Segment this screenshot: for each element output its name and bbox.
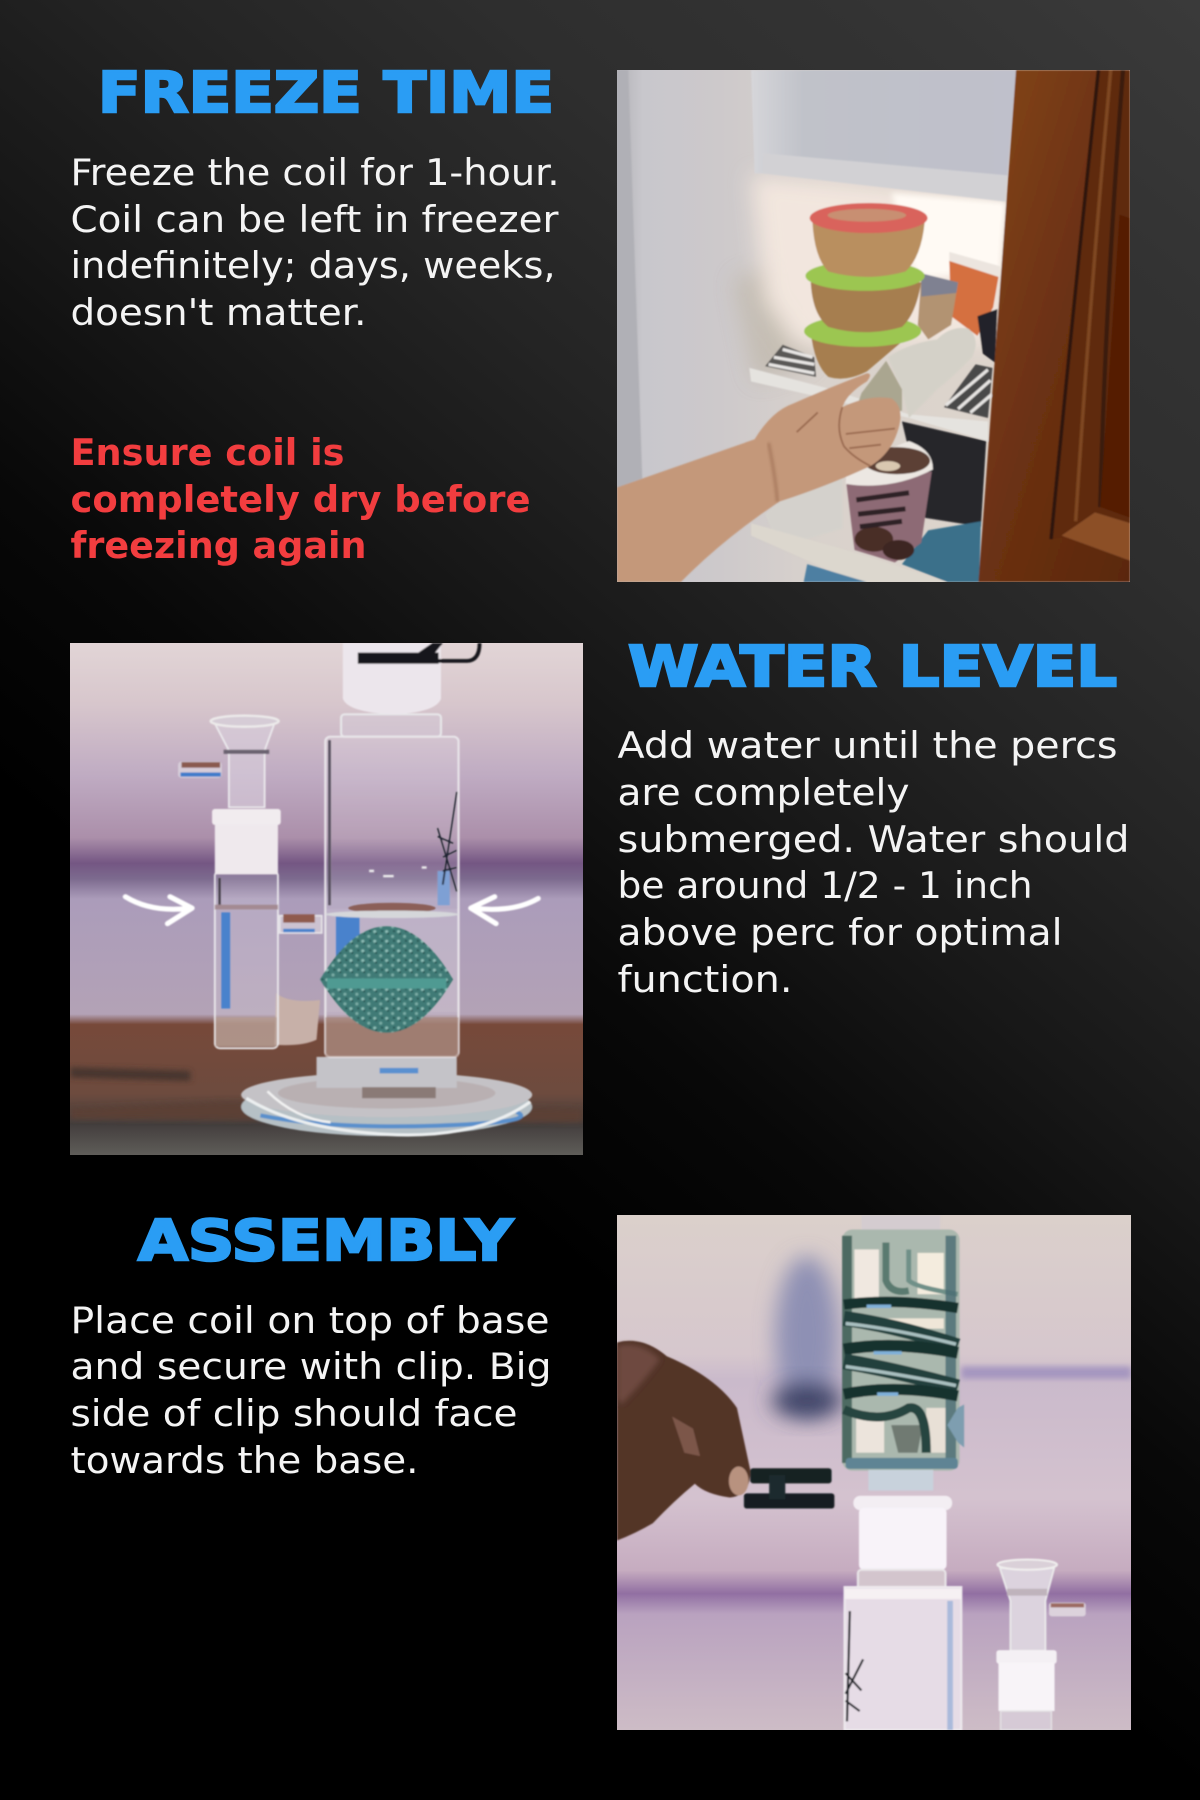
photo: attaching coil with clip — [617, 1215, 1131, 1730]
text block: assembly instructions: Place coil on top of base — [70, 1299, 550, 1342]
warning text: Ensure coil is — [70, 431, 344, 474]
clip — [744, 1468, 834, 1508]
warning text: completely dry before — [70, 478, 530, 521]
base tube — [845, 1570, 961, 1730]
text block: freeze instructions: indefinitely; days, weeks, — [70, 244, 556, 287]
text block: water instructions: above perc for optimal — [618, 911, 1062, 954]
photo: water level in bong with arrows — [70, 643, 583, 1155]
warning text — [70, 431, 530, 567]
text block: assembly instructions: and secure with clip. Big — [70, 1345, 552, 1388]
heading: assembly: ASSEMBLY — [138, 1209, 515, 1274]
text block: assembly instructions — [70, 1299, 552, 1482]
tube with water and perc — [320, 714, 459, 1057]
base of bong — [241, 1057, 532, 1136]
text block: water instructions: Add water until the percs — [618, 724, 1118, 767]
text block: freeze instructions — [70, 151, 560, 334]
text block: freeze instructions: Freeze the coil for 1-hour. — [70, 151, 560, 194]
text block: water instructions: function. — [618, 958, 792, 1001]
frosted joint — [853, 1470, 952, 1570]
side chamber — [178, 716, 322, 1048]
text block: water instructions: are completely — [618, 771, 910, 814]
icon: arm and hand — [617, 373, 900, 582]
text block: freeze instructions: Coil can be left in freezer — [70, 198, 558, 241]
section: freeze time text — [70, 61, 560, 567]
coil glass chamber — [842, 1215, 964, 1471]
text block: water instructions: submerged. Water should — [618, 818, 1130, 861]
hand holding clip — [617, 1341, 750, 1541]
text block: water instructions: be around 1/2 - 1 inch — [618, 864, 1032, 907]
small bowl piece — [996, 1559, 1086, 1730]
section: assembly text — [70, 1209, 552, 1482]
freezer door — [978, 70, 1130, 582]
photo: hand reaching into freezer — [617, 70, 1130, 582]
icon: three stacked containers — [804, 203, 928, 379]
frosted joint and clip — [343, 643, 480, 714]
freezer shelves and items — [749, 345, 992, 582]
heading: freeze time: FREEZE TIME — [98, 61, 554, 126]
text block: freeze instructions: doesn't matter. — [70, 291, 366, 334]
warning text: freezing again — [70, 524, 366, 567]
text block: assembly instructions: towards the base. — [70, 1439, 418, 1482]
text block: water instructions — [618, 724, 1130, 1001]
arrow: right — [471, 897, 538, 924]
icon: ice cream tub — [846, 441, 933, 562]
arrow: left — [125, 897, 192, 924]
section: water level text — [618, 635, 1130, 1001]
text block: assembly instructions: side of clip should face — [70, 1392, 518, 1435]
heading: water level: WATER LEVEL — [628, 635, 1117, 700]
